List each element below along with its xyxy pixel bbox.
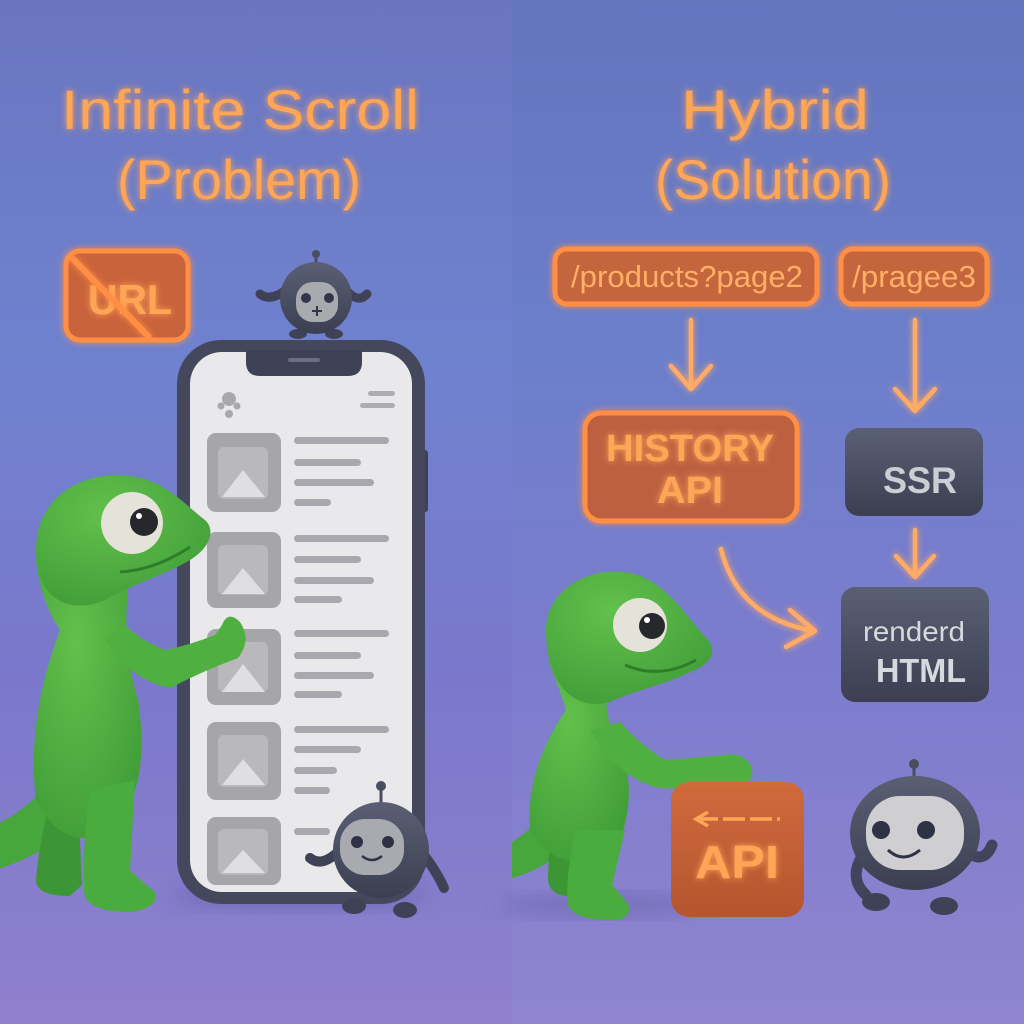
box: rendered HTML: HTML bbox=[876, 652, 966, 689]
title: Infinite Scroll (Problem): Infinite Scroll bbox=[61, 78, 419, 141]
box: rendered HTML: renderd bbox=[863, 616, 965, 647]
dash connector bbox=[912, 717, 918, 742]
title: Infinite Scroll (Problem): (Problem) bbox=[117, 148, 361, 211]
list row 3 bbox=[207, 629, 389, 705]
title: Hybrid (Solution): (Solution) bbox=[655, 148, 891, 211]
phone bbox=[170, 340, 430, 907]
badge: crossed-out URL: URL bbox=[88, 276, 172, 323]
block: API bbox=[671, 782, 804, 917]
URL box: /pragee3 bbox=[841, 249, 987, 304]
icon: phone menu bbox=[360, 391, 395, 408]
box: rendered HTML bbox=[841, 587, 989, 702]
list row 2 bbox=[207, 532, 389, 608]
URL box: /products?page2: /products?page2 bbox=[571, 259, 803, 294]
block: API: API bbox=[695, 836, 779, 888]
badge: crossed-out URL bbox=[66, 251, 188, 340]
URL box: /pragee3: /pragee3 bbox=[852, 259, 976, 294]
list row 4 bbox=[207, 722, 389, 800]
arrow: SSR to rendered HTML bbox=[896, 530, 934, 577]
arrow: page2 to History API bbox=[671, 320, 711, 389]
gecko: right panel bbox=[500, 572, 752, 920]
title: Hybrid (Solution) bbox=[655, 78, 891, 211]
arrow: History API to rendered HTML bbox=[721, 549, 815, 647]
list row 5 bbox=[207, 817, 330, 885]
title: Infinite Scroll (Problem) bbox=[61, 78, 419, 211]
background: right panel bbox=[512, 0, 1024, 1024]
arrow: page3 to SSR bbox=[895, 320, 935, 411]
box: History API bbox=[585, 413, 797, 521]
box: History API: API bbox=[657, 470, 723, 512]
URL box: /products?page2 bbox=[555, 249, 817, 304]
background: left panel bbox=[0, 0, 512, 1024]
title: Hybrid (Solution): Hybrid bbox=[681, 78, 869, 141]
list row 1 bbox=[207, 433, 389, 512]
robot: right panel bbox=[850, 759, 992, 915]
box: SSR bbox=[845, 428, 983, 516]
icon: phone profile bbox=[218, 392, 240, 418]
gecko: left panel bbox=[0, 475, 246, 912]
box: SSR: SSR bbox=[883, 460, 957, 501]
robot on top of phone bbox=[260, 250, 367, 339]
robot bottom right of phone bbox=[310, 781, 444, 918]
box: History API: HISTORY bbox=[606, 428, 774, 470]
